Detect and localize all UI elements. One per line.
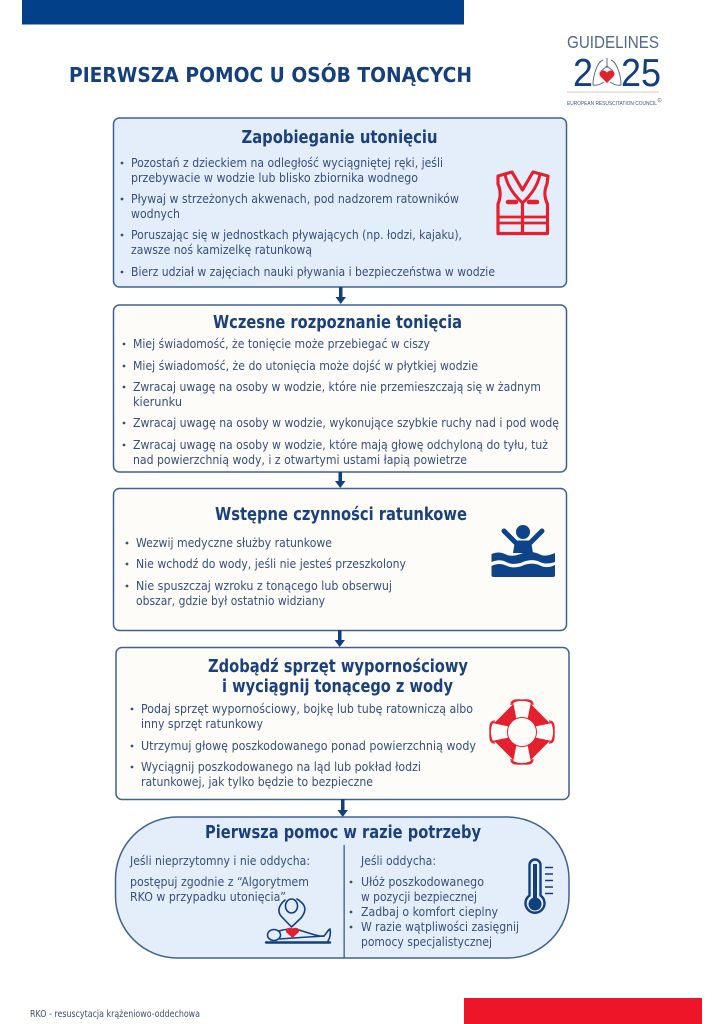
prevention bullet list: Pozostań z dzieckiem na odległość wyciągniętej ręki, jeśli: [131, 156, 443, 170]
right column: breathing: Zadbaj o komfort cieplny: [361, 904, 498, 919]
arrow 2: [335, 472, 346, 488]
right column: breathing: w pozycji bezpiecznej: [361, 889, 477, 904]
extraction bullet list: Podaj sprzęt wypornościowy, bojkę lub tubę ratowniczą albo: [141, 702, 473, 716]
heading: wstępne czynności: Wstępne czynności ratunkowe: [215, 504, 467, 525]
prevention bullet list: Pływaj w strzeżonych akwenach, pod nadzorem ratowników: [131, 192, 459, 206]
icon: lifebuoy: [485, 695, 559, 769]
recognition bullet list: Zwracaj uwagę na osoby w wodzie, które nie przemieszczają się w żadnym: [133, 380, 541, 394]
rescue bullet list: Nie wchodź do wody, jeśli nie jesteś przeszkolony: [136, 557, 406, 571]
recognition bullet list: kierunku: [133, 395, 182, 409]
left column: unconscious: RKO w przypadku utonięcia”: [130, 889, 286, 904]
right column: breathing: W razie wątpliwości zasięgnij: [361, 919, 519, 934]
heading: zapobieganie: Zapobieganie utonięciu: [242, 127, 438, 148]
heading: wczesne rozpoznanie: Wczesne rozpoznanie tonięcia: [213, 312, 462, 333]
panel: wstępne czynności: [114, 488, 566, 630]
heading: zdobądź sprzęt: i wyciągnij tonącego z wody: [222, 676, 453, 697]
left column: unconscious: postępuj zgodnie z “Algorytmem: [130, 874, 309, 889]
extraction bullet list: [131, 702, 476, 789]
prevention bullet list: Poruszając się w jednostkach pływających (np. łodzi, kajaku),: [131, 228, 462, 242]
prevention bullet list: Bierz udział w zajęciach nauki pływania i bezpieczeństwa w wodzie: [131, 265, 495, 279]
heading: zdobądź sprzęt: Zdobądź sprzęt wypornościowy: [208, 656, 468, 677]
prevention bullet list: [121, 156, 495, 279]
panel: wczesne rozpoznanie: [114, 305, 566, 472]
icon: CPR: [266, 899, 330, 942]
extraction bullet list: Utrzymuj głowę poszkodowanego ponad powierzchnią wody: [141, 739, 476, 753]
recognition bullet list: Zwracaj uwagę na osoby w wodzie, wykonujące szybkie ruchy nad i pod wodę: [133, 416, 559, 430]
right column: breathing: Ułóż poszkodowanego: [361, 874, 484, 889]
heading: pierwsza pomoc: Pierwsza pomoc w razie potrzeby: [205, 822, 481, 843]
right column: breathing: Jeśli oddycha:: [360, 853, 436, 868]
arrow 3: [334, 630, 345, 647]
arrow 4: [338, 799, 348, 817]
bottom red bar: [464, 998, 702, 1024]
rescue bullet list: obszar, gdzie był ostatnio widziany: [136, 594, 325, 608]
icon: drowning swimmer: [492, 525, 555, 577]
recognition bullet list: [123, 337, 559, 467]
logo: Guidelines 2025: ©: [658, 97, 662, 104]
logo: Guidelines 2025: EUROPEAN RESUSCITATION COUNCIL: [567, 101, 657, 107]
right column: breathing: [350, 853, 519, 949]
top blue bar: [22, 0, 464, 24]
left column: unconscious: Jeśli nieprzytomny i nie oddycha:: [129, 853, 310, 868]
footnote: RKO - resuscytacja krążeniowo-oddechowa: [30, 1009, 200, 1020]
rescue bullet list: Nie spuszczaj wzroku z tonącego lub obserwuj: [136, 579, 392, 593]
prevention bullet list: wodnych: [131, 207, 180, 221]
rescue bullet list: [126, 536, 406, 608]
extraction bullet list: Wyciągnij poszkodowanego na ląd lub pokład łodzi: [141, 760, 421, 774]
rescue bullet list: Wezwij medyczne służby ratunkowe: [136, 536, 332, 550]
left column: unconscious: [129, 853, 310, 904]
heading: zdobądź sprzęt: [208, 656, 468, 697]
column divider: [344, 845, 345, 958]
logo: Guidelines 2025: [567, 32, 662, 107]
logo: Guidelines 2025: GUIDELINES: [567, 32, 659, 52]
recognition bullet list: Miej świadomość, że tonięcie może przebiegać w ciszy: [133, 337, 430, 351]
recognition bullet list: Zwracaj uwagę na osoby w wodzie, które mają głowę odchyloną do tyłu, tuż: [133, 438, 548, 452]
prevention bullet list: zawsze noś kamizelkę ratunkową: [131, 243, 312, 257]
right column: breathing: pomocy specjalistycznej: [361, 934, 492, 949]
panel: sprzęt wypornościowy: [116, 648, 569, 800]
main title: PIERWSZA POMOC U OSÓB TONĄCYCH: [69, 62, 472, 87]
panel: zapobieganie utonięciu: [114, 118, 566, 287]
logo: Guidelines 2025: 25: [621, 52, 661, 95]
arrow 1: [336, 287, 346, 304]
recognition bullet list: Miej świadomość, że do utonięcia może dojść w płytkiej wodzie: [133, 359, 478, 373]
extraction bullet list: ratunkowej, jak tylko będzie to bezpieczne: [141, 775, 373, 789]
recognition bullet list: nad powierzchnią wody, i z otwartymi ustami łapią powietrze: [133, 453, 467, 467]
extraction bullet list: inny sprzęt ratunkowy: [141, 717, 263, 731]
logo: Guidelines 2025: 2: [573, 52, 593, 95]
icon: life vest: [498, 172, 548, 234]
icon: thermometer: [526, 860, 553, 913]
prevention bullet list: przebywacie w wodzie lub blisko zbiornika wodnego: [131, 171, 418, 185]
panel: pierwsza pomoc: [116, 817, 569, 958]
